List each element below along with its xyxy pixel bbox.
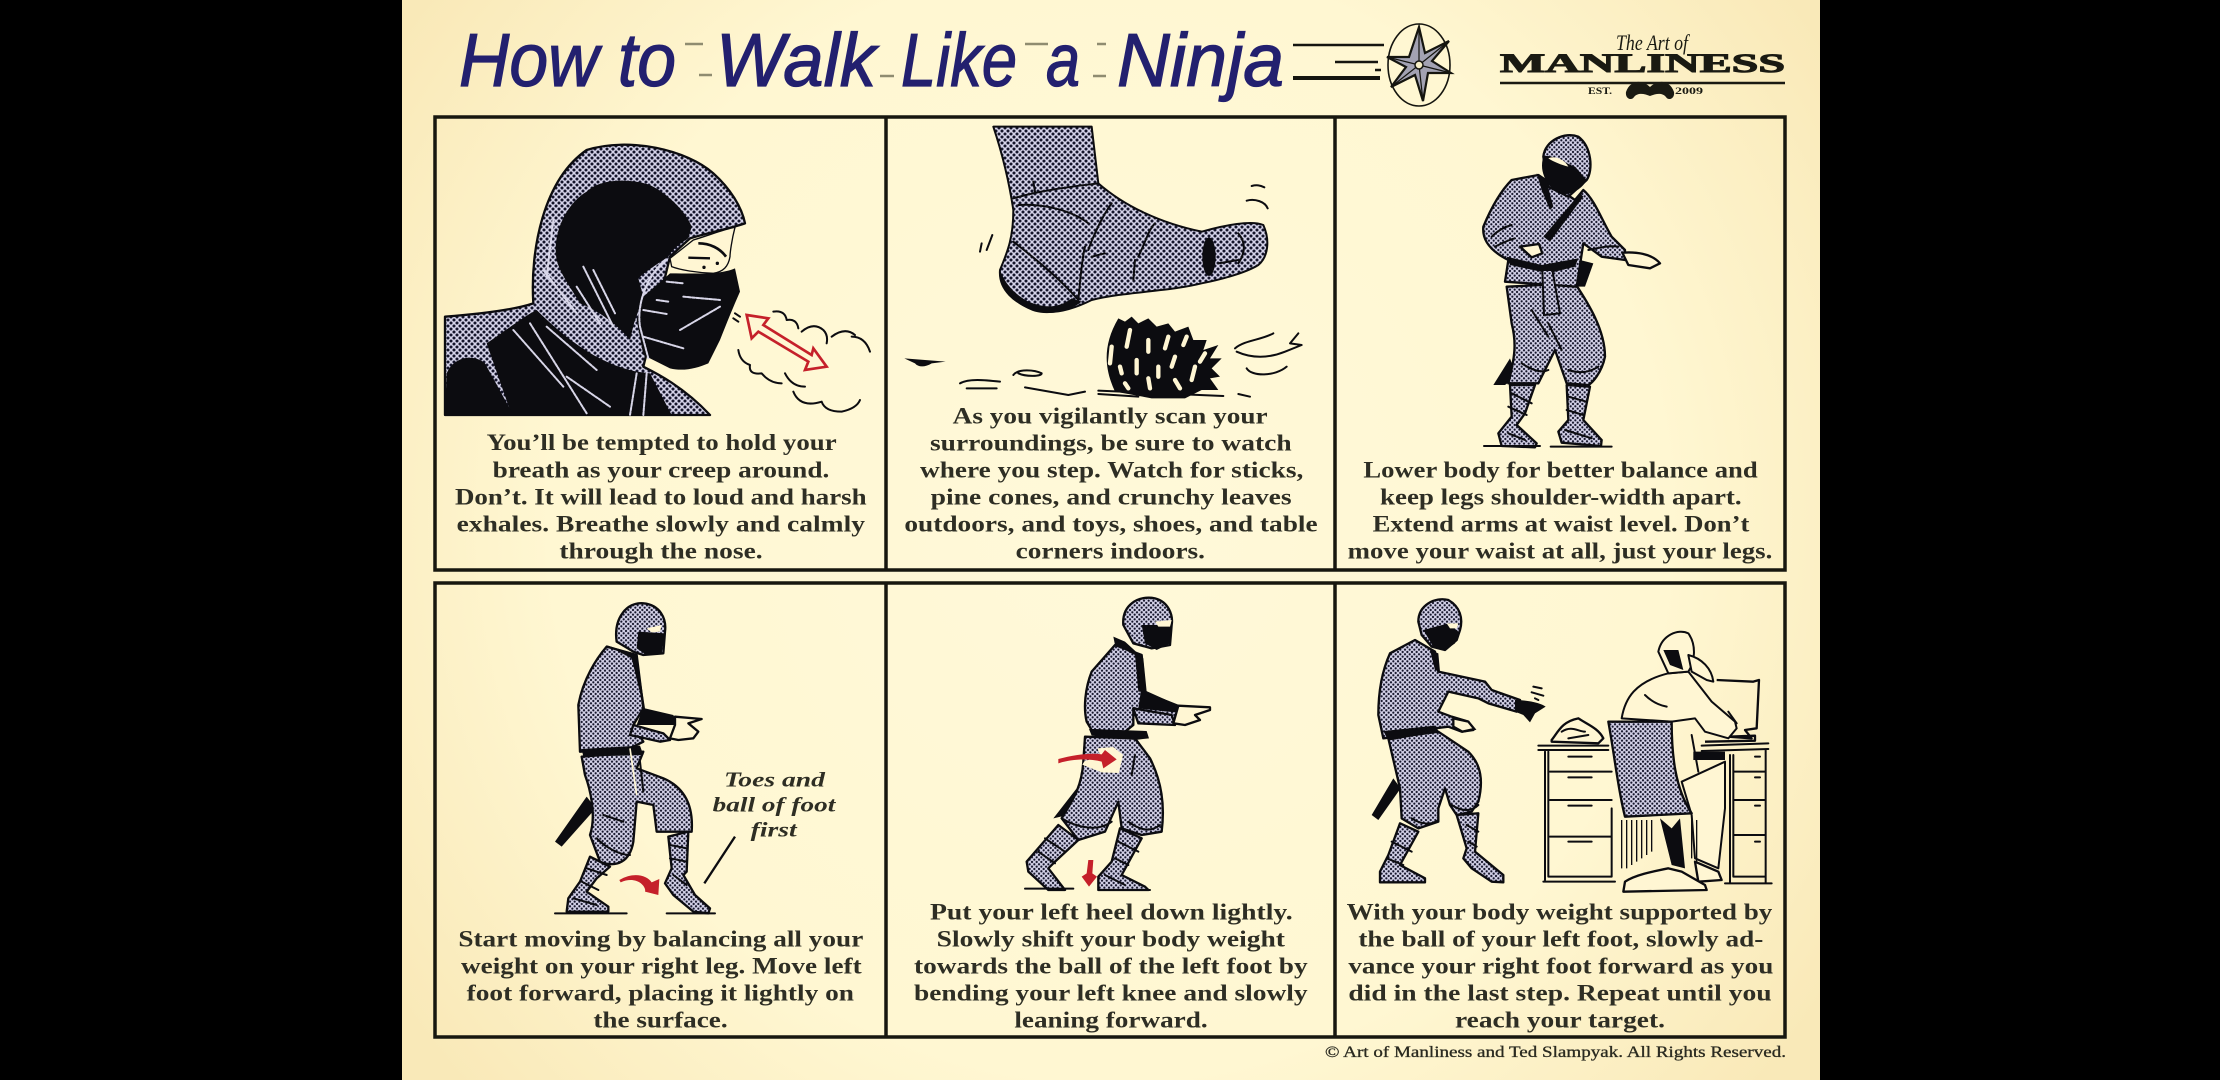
logo: The Art of Manliness [1500,30,1785,99]
text: stance tip [1348,457,1772,564]
text: first step tip: weight on your right leg. Move left [461,954,862,980]
text: shift weight tip: leaning forward. [1014,1008,1208,1034]
panel: shift weight [914,598,1308,1034]
illustration: ninja shifting weight [1027,598,1210,890]
text: shift weight tip [914,900,1308,1034]
arrow: shift body weight [1058,750,1117,768]
text: shift weight tip: Put your left heel down lightly. [930,900,1293,926]
illustration: ninja facing forward [1483,135,1660,447]
text: first step tip: Start moving by balancing all your [458,927,863,953]
callout: toes and ball of foot first: ball of foot [713,795,837,817]
text: shift weight tip: towards the ball of the left foot by [914,954,1308,980]
panel: stance [1348,135,1772,564]
illustration: pine cone [1107,317,1222,398]
illustration: ninja head in profile [445,145,745,415]
text: breathing tip: breath as your creep around. [493,457,829,483]
logo: The Art of Manliness: MANLINESS [1500,49,1785,78]
speed lines [1293,45,1384,78]
illustration: foot [993,127,1267,313]
title: Ninja [1117,18,1284,102]
text: reach target tip: With your body weight supported by [1347,900,1773,926]
text: breathing tip: You’ll be tempted to hold your [487,430,837,456]
motion ticks [980,185,1268,252]
illustration: laptop monitor [1705,680,1759,742]
text: reach target tip [1347,900,1773,1034]
text: first step tip [458,927,863,1034]
text: watch step tip: pine cones, and crunchy leaves [931,484,1292,510]
illustration: desk with drawers [1538,718,1772,883]
text: watch step tip: where you step. Watch for sticks, [920,457,1303,483]
ground marks [555,910,715,916]
title: a [1046,18,1080,102]
logo: The Art of Manliness: EST. [1588,86,1612,96]
panel: first step [458,603,863,1034]
arrow: heel down [1082,860,1097,887]
text: breathing tip: Don’t. It will lead to loud and harsh [455,484,867,510]
arrow: in and out breath [747,315,827,370]
text: reach target tip: the ball of your left foot, slowly ad- [1358,927,1763,953]
copyright: © Art of Manliness and Ted Slampyak. All Rights Reserved. [1325,1044,1786,1061]
illustration: office chair [1608,722,1707,892]
ground marks [1484,443,1612,450]
panel frames [435,117,1785,1037]
text: reach target tip: reach your target. [1455,1008,1665,1034]
text: breathing tip: through the nose. [559,538,763,564]
panel: reach target [1347,599,1773,1034]
text: breathing tip: exhales. Breathe slowly and calmly [457,511,865,537]
text: shift weight tip: Slowly shift your body weight [937,927,1285,953]
icon: breath cloud [733,311,870,412]
title: Like [901,18,1017,102]
callout: toes and ball of foot first: first [751,820,798,842]
text: watch step tip: outdoors, and toys, shoes, and table [904,511,1318,537]
text: watch step tip: corners indoors. [1016,538,1205,564]
text: breathing tip [455,430,867,564]
title: How to [459,18,676,102]
text: stance tip: Lower body for better balance and [1363,457,1758,483]
icon: shuriken [1387,24,1451,106]
callout: toes and ball of foot first: Toes and [724,770,826,792]
text: first step tip: the surface. [593,1008,728,1034]
text: stance tip: keep legs shoulder-width apart. [1380,484,1742,510]
text: watch step tip: surroundings, be sure to watch [930,430,1292,456]
illustration: ninja stepping forward [555,603,710,913]
illustration: ninja approaching [1372,599,1546,882]
title [459,18,1284,102]
panel: watch your step [904,127,1318,564]
text: watch step tip: As you vigilantly scan your [953,403,1268,429]
logo: The Art of Manliness: The Art of [1616,30,1690,55]
text: shift weight tip: bending your left knee and slowly [914,981,1308,1007]
text: stance tip: Extend arms at waist level. Don’t [1373,511,1750,537]
logo: The Art of Manliness: 2009 [1675,86,1704,96]
callout: toes and ball of foot first [704,770,837,883]
text: reach target tip: did in the last step. Repeat until you [1348,981,1772,1007]
title: Walk [716,18,879,102]
arrow: foot moves forward [619,875,659,895]
text: reach target tip: vance your right foot forward as you [1348,954,1773,980]
text: watch step tip [904,403,1318,564]
ground marks [1025,889,1150,890]
paper background [402,0,1820,1080]
text: first step tip: foot forward, placing it lightly on [467,981,854,1007]
ground debris and leaves [904,333,1302,397]
text: stance tip: move your waist at all, just your legs. [1348,538,1772,564]
illustration: man on phone at desk [1622,632,1737,882]
panel: breathing [445,145,870,564]
